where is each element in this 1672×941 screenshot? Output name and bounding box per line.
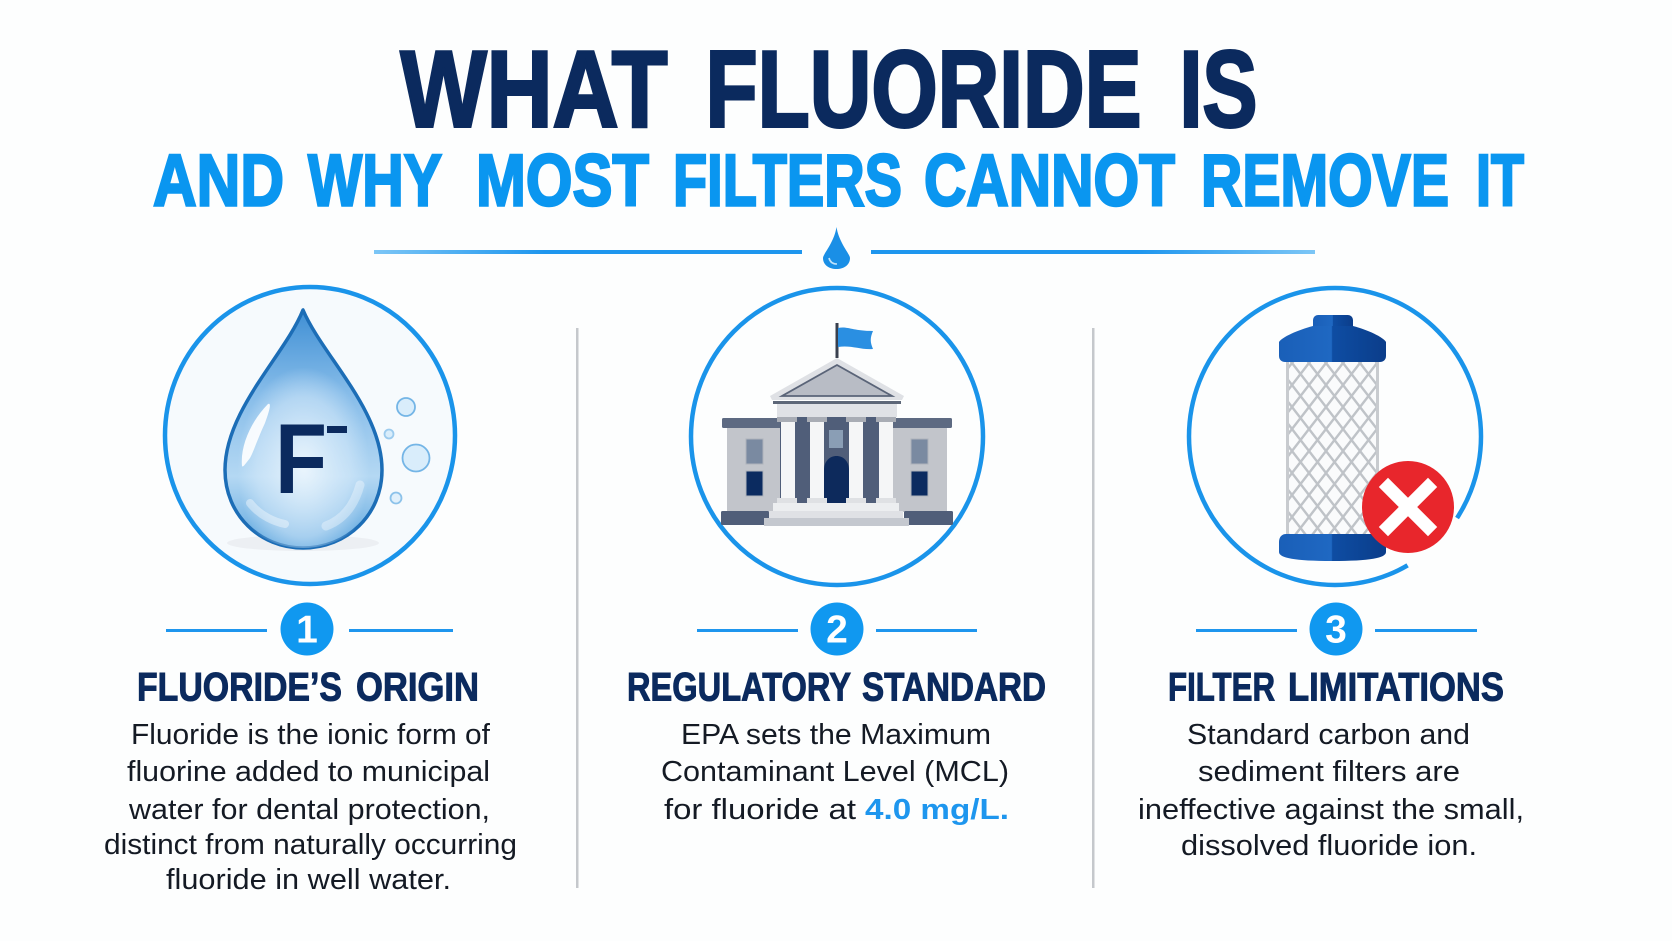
heading: fluoride's origin: ORIGIN [356,666,479,710]
text block: origin description: fluoride in well water. [166,864,451,896]
subtitle: MOST [476,140,649,222]
text block: filter description: Standard carbon and [1187,719,1470,751]
icon: filter cartridge with red X in circle [1189,288,1481,585]
text block: filter description: ineffective against the small, [1138,794,1524,826]
subtitle: FILTERS [673,140,902,222]
number badge 3: 3 [1325,608,1347,652]
subtitle: WHY [308,140,442,222]
text block: filter description: dissolved fluoride ion. [1181,830,1477,862]
title: FLUORIDE [706,28,1142,150]
panel: filter limitations [1138,288,1524,862]
text block: origin description: fluorine added to municipal [127,756,490,788]
icon: government building in circle [691,288,983,585]
text block: origin description: water for dental protection, [128,794,490,826]
title [400,28,1258,150]
text block: filter description [1138,719,1524,862]
title: WHAT [400,28,668,150]
number badge 2 [697,602,977,656]
number badge 1: 1 [296,608,318,652]
heading: regulatory standard: REGULATORY [627,666,851,710]
title: IS [1180,28,1258,150]
number badge 2: 2 [826,608,848,652]
heading: filter limitations [1168,666,1504,710]
subtitle: REMOVE [1201,140,1449,222]
heading: fluoride's origin: FLUORIDE’S [137,666,342,710]
text block: MCL description [661,719,1009,826]
panel: regulatory standard [627,288,1046,826]
text block: filter description: sediment filters are [1198,756,1460,788]
heading: filter limitations: FILTER [1168,666,1275,710]
heading: filter limitations: LIMITATIONS [1288,666,1504,710]
column divider left [576,328,578,888]
number badge 3 [1196,602,1477,656]
subtitle: IT [1476,140,1524,222]
heading: regulatory standard [627,666,1046,710]
text block: MCL description: 4.0 mg/L. [865,794,1009,826]
heading: regulatory standard: STANDARD [862,666,1046,710]
text block: origin description: Fluoride is the ionic form of [131,719,491,751]
column divider right [1092,328,1094,888]
text block: origin description: distinct from naturally occurring [104,829,517,861]
text block: MCL description: for fluoride at [664,794,856,826]
text block: origin description [104,719,517,896]
icon: fluoride drop in circle [165,287,455,584]
icon: fluoride drop in circle: F [275,403,327,514]
subtitle [153,140,1524,222]
text block: MCL description: EPA sets the Maximum [681,719,991,751]
subtitle: AND [153,140,284,222]
panel: fluoride's origin [104,287,517,896]
number badge 1 [166,602,453,656]
text block: MCL description: Contaminant Level (MCL) [661,756,1009,788]
header divider with drop [374,227,1315,269]
subtitle: CANNOT [924,140,1175,222]
